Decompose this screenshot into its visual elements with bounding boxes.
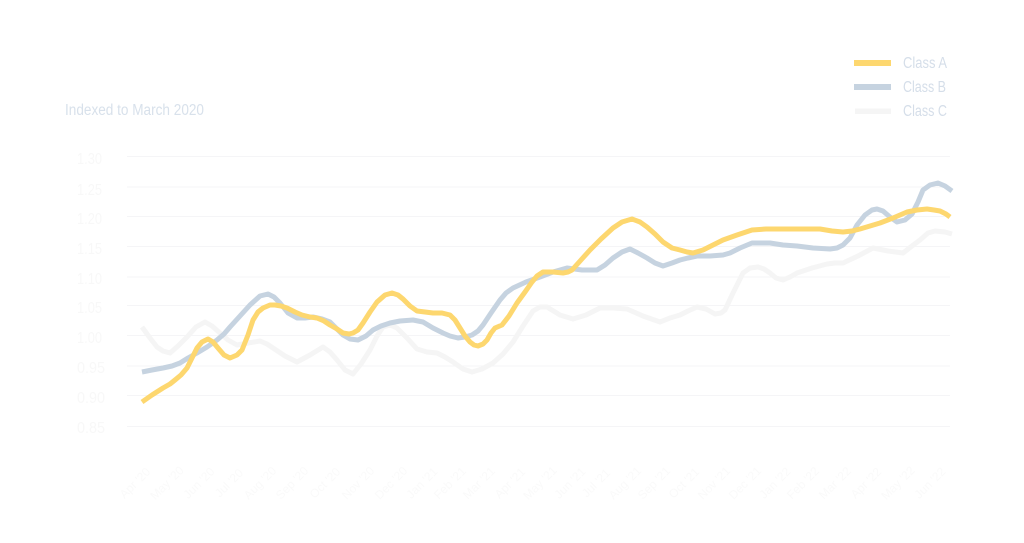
x axis labels: May '21: [520, 463, 560, 503]
x axis labels: Dec '20: [372, 464, 410, 502]
line: Class A: [142, 209, 950, 402]
y axis labels: [77, 151, 105, 437]
x axis labels: Feb '21: [431, 464, 469, 502]
y axis labels: 1.00: [77, 330, 102, 347]
x axis labels: Apr '22: [848, 465, 884, 501]
legend: Class B: Class B: [903, 79, 946, 96]
x axis labels: [117, 463, 949, 503]
x axis labels: Jun '21: [551, 464, 589, 502]
x axis labels: Jul '21: [579, 466, 613, 500]
y axis labels: 0.90: [77, 390, 105, 407]
x axis labels: Oct '20: [307, 465, 343, 501]
y axis labels: 0.95: [77, 360, 105, 377]
line: Class C: [142, 231, 952, 374]
x axis labels: Apr '21: [492, 465, 528, 501]
y axis labels: 1.10: [77, 271, 102, 288]
legend: Class C: Class C: [903, 103, 947, 120]
x axis labels: Jan '22: [756, 464, 794, 502]
axis subtitle: Indexed to March 2020: [65, 102, 204, 119]
x axis labels: Jan '21: [403, 464, 441, 502]
legend: Class A: Class A: [903, 55, 948, 72]
x axis labels: Feb '22: [784, 464, 822, 502]
x axis labels: Nov '20: [339, 464, 377, 502]
y axis labels: 1.25: [77, 182, 102, 199]
y axis labels: 1.20: [77, 211, 102, 228]
line: Class B: [142, 183, 952, 372]
x axis labels: Aug '21: [606, 464, 644, 502]
x axis labels: Apr '20: [117, 465, 153, 501]
x axis labels: May '22: [878, 463, 918, 503]
y axis labels: 1.05: [77, 300, 102, 317]
x axis labels: Sep '21: [635, 464, 673, 502]
legend: [854, 55, 948, 120]
x axis labels: Jun '20: [180, 464, 218, 502]
x axis labels: Mar '21: [460, 464, 498, 502]
x axis labels: May '20: [147, 463, 187, 503]
y axis labels: 0.85: [77, 420, 105, 437]
x axis labels: Jul '20: [212, 466, 246, 500]
x axis labels: Dec '21: [726, 464, 764, 502]
x axis labels: Oct '21: [666, 465, 702, 501]
x axis labels: Nov '21: [695, 464, 733, 502]
y axis labels: 1.30: [77, 151, 102, 168]
x axis labels: Sep '20: [273, 464, 311, 502]
y axis labels: 1.15: [77, 241, 102, 258]
x axis labels: Aug '20: [241, 464, 279, 502]
x axis labels: Mar '22: [816, 464, 854, 502]
x axis labels: Jun '22: [911, 464, 949, 502]
